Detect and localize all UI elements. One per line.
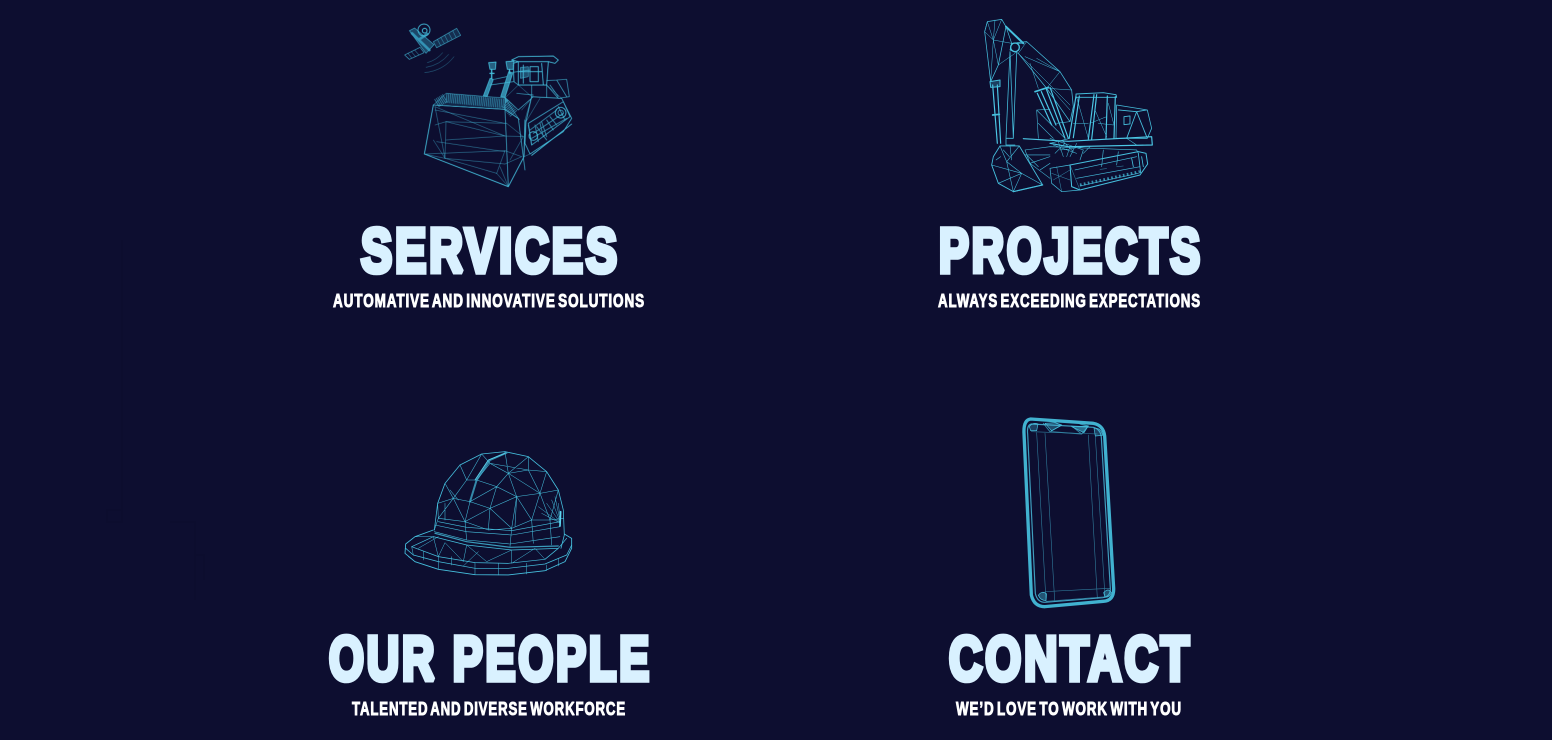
heading: projects	[938, 217, 1203, 311]
icon: excavator bucket	[992, 146, 1043, 192]
icon: helmet brim	[405, 530, 572, 575]
icon: satellite	[405, 24, 461, 73]
title: SERVICES	[361, 217, 620, 286]
subtitle: AUTOMATIVE AND INNOVATIVE SOLUTIONS	[333, 290, 645, 311]
icon: hard hat wireframe	[405, 452, 572, 575]
icon: phone inner frame	[1027, 424, 1110, 602]
icon: smartphone wireframe	[1024, 419, 1114, 607]
icon: phone corners	[1029, 423, 1111, 601]
icon: satellite and bulldozer wireframe	[405, 24, 572, 187]
icon: helmet dome	[434, 452, 564, 548]
icon: bulldozer body	[483, 56, 572, 157]
icon: excavator tracks	[1025, 147, 1148, 192]
title: PROJECTS	[939, 217, 1203, 286]
icon: excavator cab	[1023, 93, 1152, 157]
title: CONTACT	[949, 625, 1192, 694]
subtitle: TALENTED AND DIVERSE WORKFORCE	[352, 698, 626, 719]
subtitle: WE’D LOVE TO WORK WITH YOU	[956, 698, 1182, 719]
heading: services	[333, 217, 645, 311]
subtitle: ALWAYS EXCEEDING EXPECTATIONS	[938, 290, 1201, 311]
heading: contact	[949, 625, 1192, 719]
icon: excavator stick and boom	[985, 19, 1073, 145]
icon: phone outer frame	[1024, 419, 1114, 607]
heading: our people	[329, 625, 652, 719]
icon: phone screen lines	[1031, 423, 1110, 601]
title: OUR PEOPLE	[329, 625, 652, 694]
icon: bulldozer blade	[424, 93, 525, 187]
icon: excavator wireframe	[985, 19, 1152, 192]
